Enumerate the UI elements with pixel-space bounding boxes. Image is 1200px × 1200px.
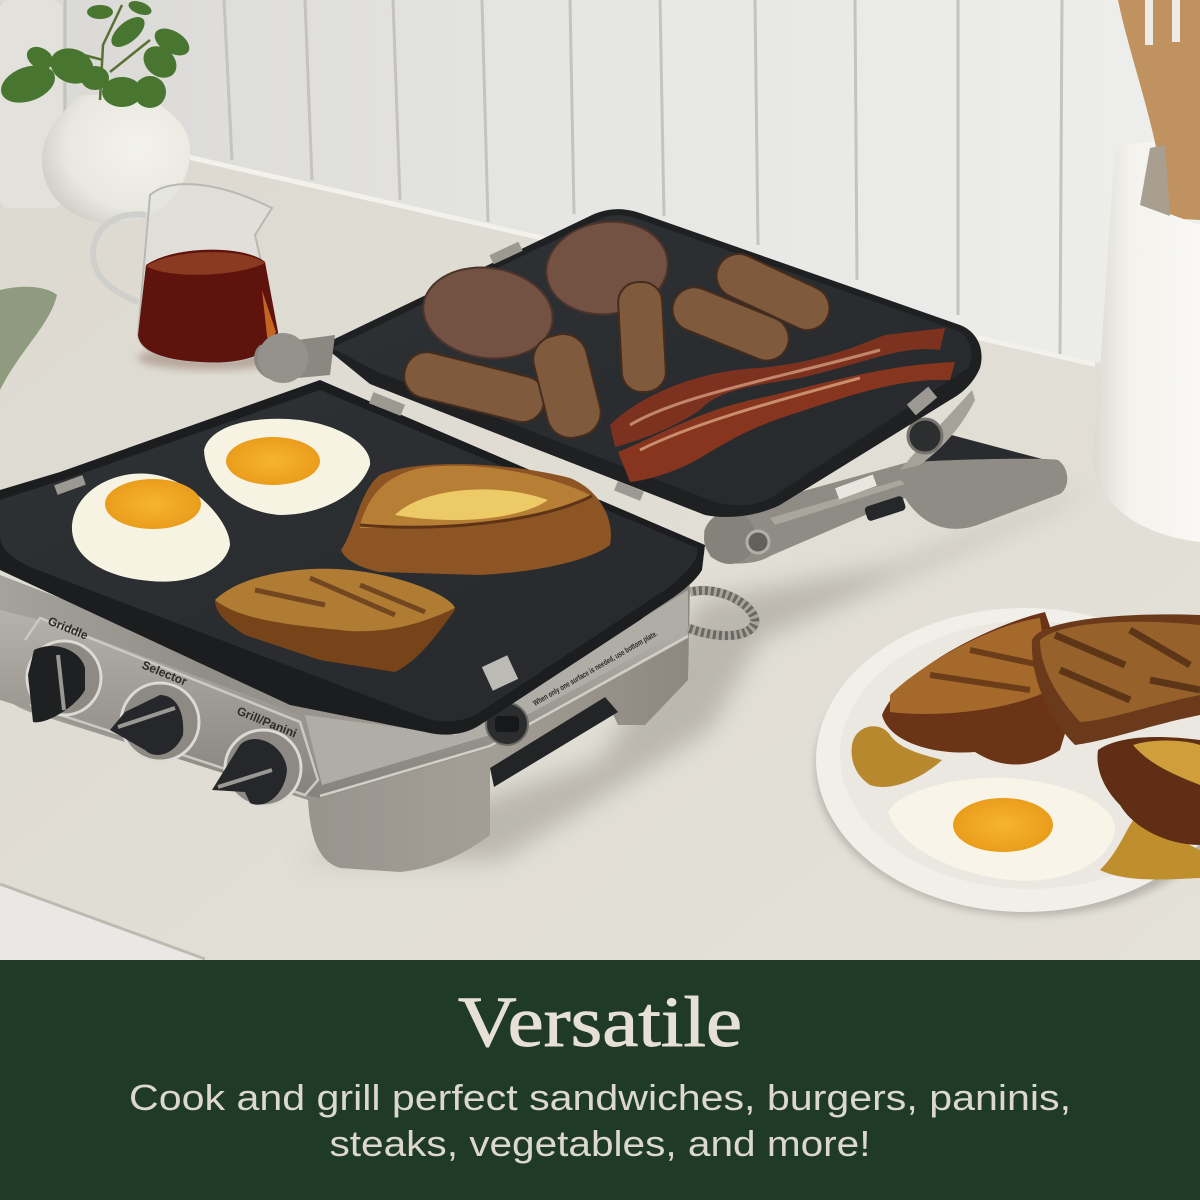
griddle: upper plate with meats <box>322 209 982 517</box>
dial 3 <box>212 730 301 806</box>
bottom banner <box>0 960 1200 1200</box>
description text <box>129 1077 1071 1164</box>
sausage links <box>400 247 837 443</box>
description text: steaks, vegetables, and more! <box>330 1123 870 1164</box>
syrup pools <box>852 726 942 787</box>
french toast 2 <box>215 569 455 672</box>
front plate clip <box>482 655 518 691</box>
control labels: Selector <box>140 658 189 689</box>
control labels: Griddle <box>46 614 90 643</box>
egg 2 <box>204 419 370 515</box>
control labels <box>46 614 659 741</box>
french toast 1 <box>341 464 611 575</box>
utensil crock with wooden spoon <box>1092 0 1200 542</box>
griddle: hinge knob <box>254 333 335 383</box>
vase with plant <box>0 0 194 224</box>
sausage patties <box>417 214 674 367</box>
serving plate with toast, egg and syrup <box>815 608 1200 916</box>
plate clips <box>54 242 937 501</box>
fried egg <box>888 778 1115 881</box>
griddle shadow on counter <box>300 485 1090 860</box>
description text: Cook and grill perfect sandwiches, burgers, paninis, <box>129 1077 1071 1118</box>
control labels: When only one surface is needed, use bottom plate. <box>532 629 659 708</box>
griddle: power cord <box>688 591 755 636</box>
heading: Versatile <box>458 982 742 1062</box>
folded green towel <box>0 287 57 390</box>
griddle: lower plate with eggs and toast <box>0 242 937 735</box>
glass jug of syrup <box>93 184 282 370</box>
photo: kitchen backdrop <box>0 0 1200 960</box>
toast stack <box>882 612 1075 764</box>
griddle: open handle and arm <box>704 390 1067 564</box>
control labels: Grill/Panini <box>235 704 299 741</box>
griddle: stainless base and controls <box>0 575 690 872</box>
bacon <box>610 328 945 447</box>
egg 1 <box>72 473 230 582</box>
dial 1 <box>27 641 101 722</box>
dial 2 <box>110 683 199 761</box>
